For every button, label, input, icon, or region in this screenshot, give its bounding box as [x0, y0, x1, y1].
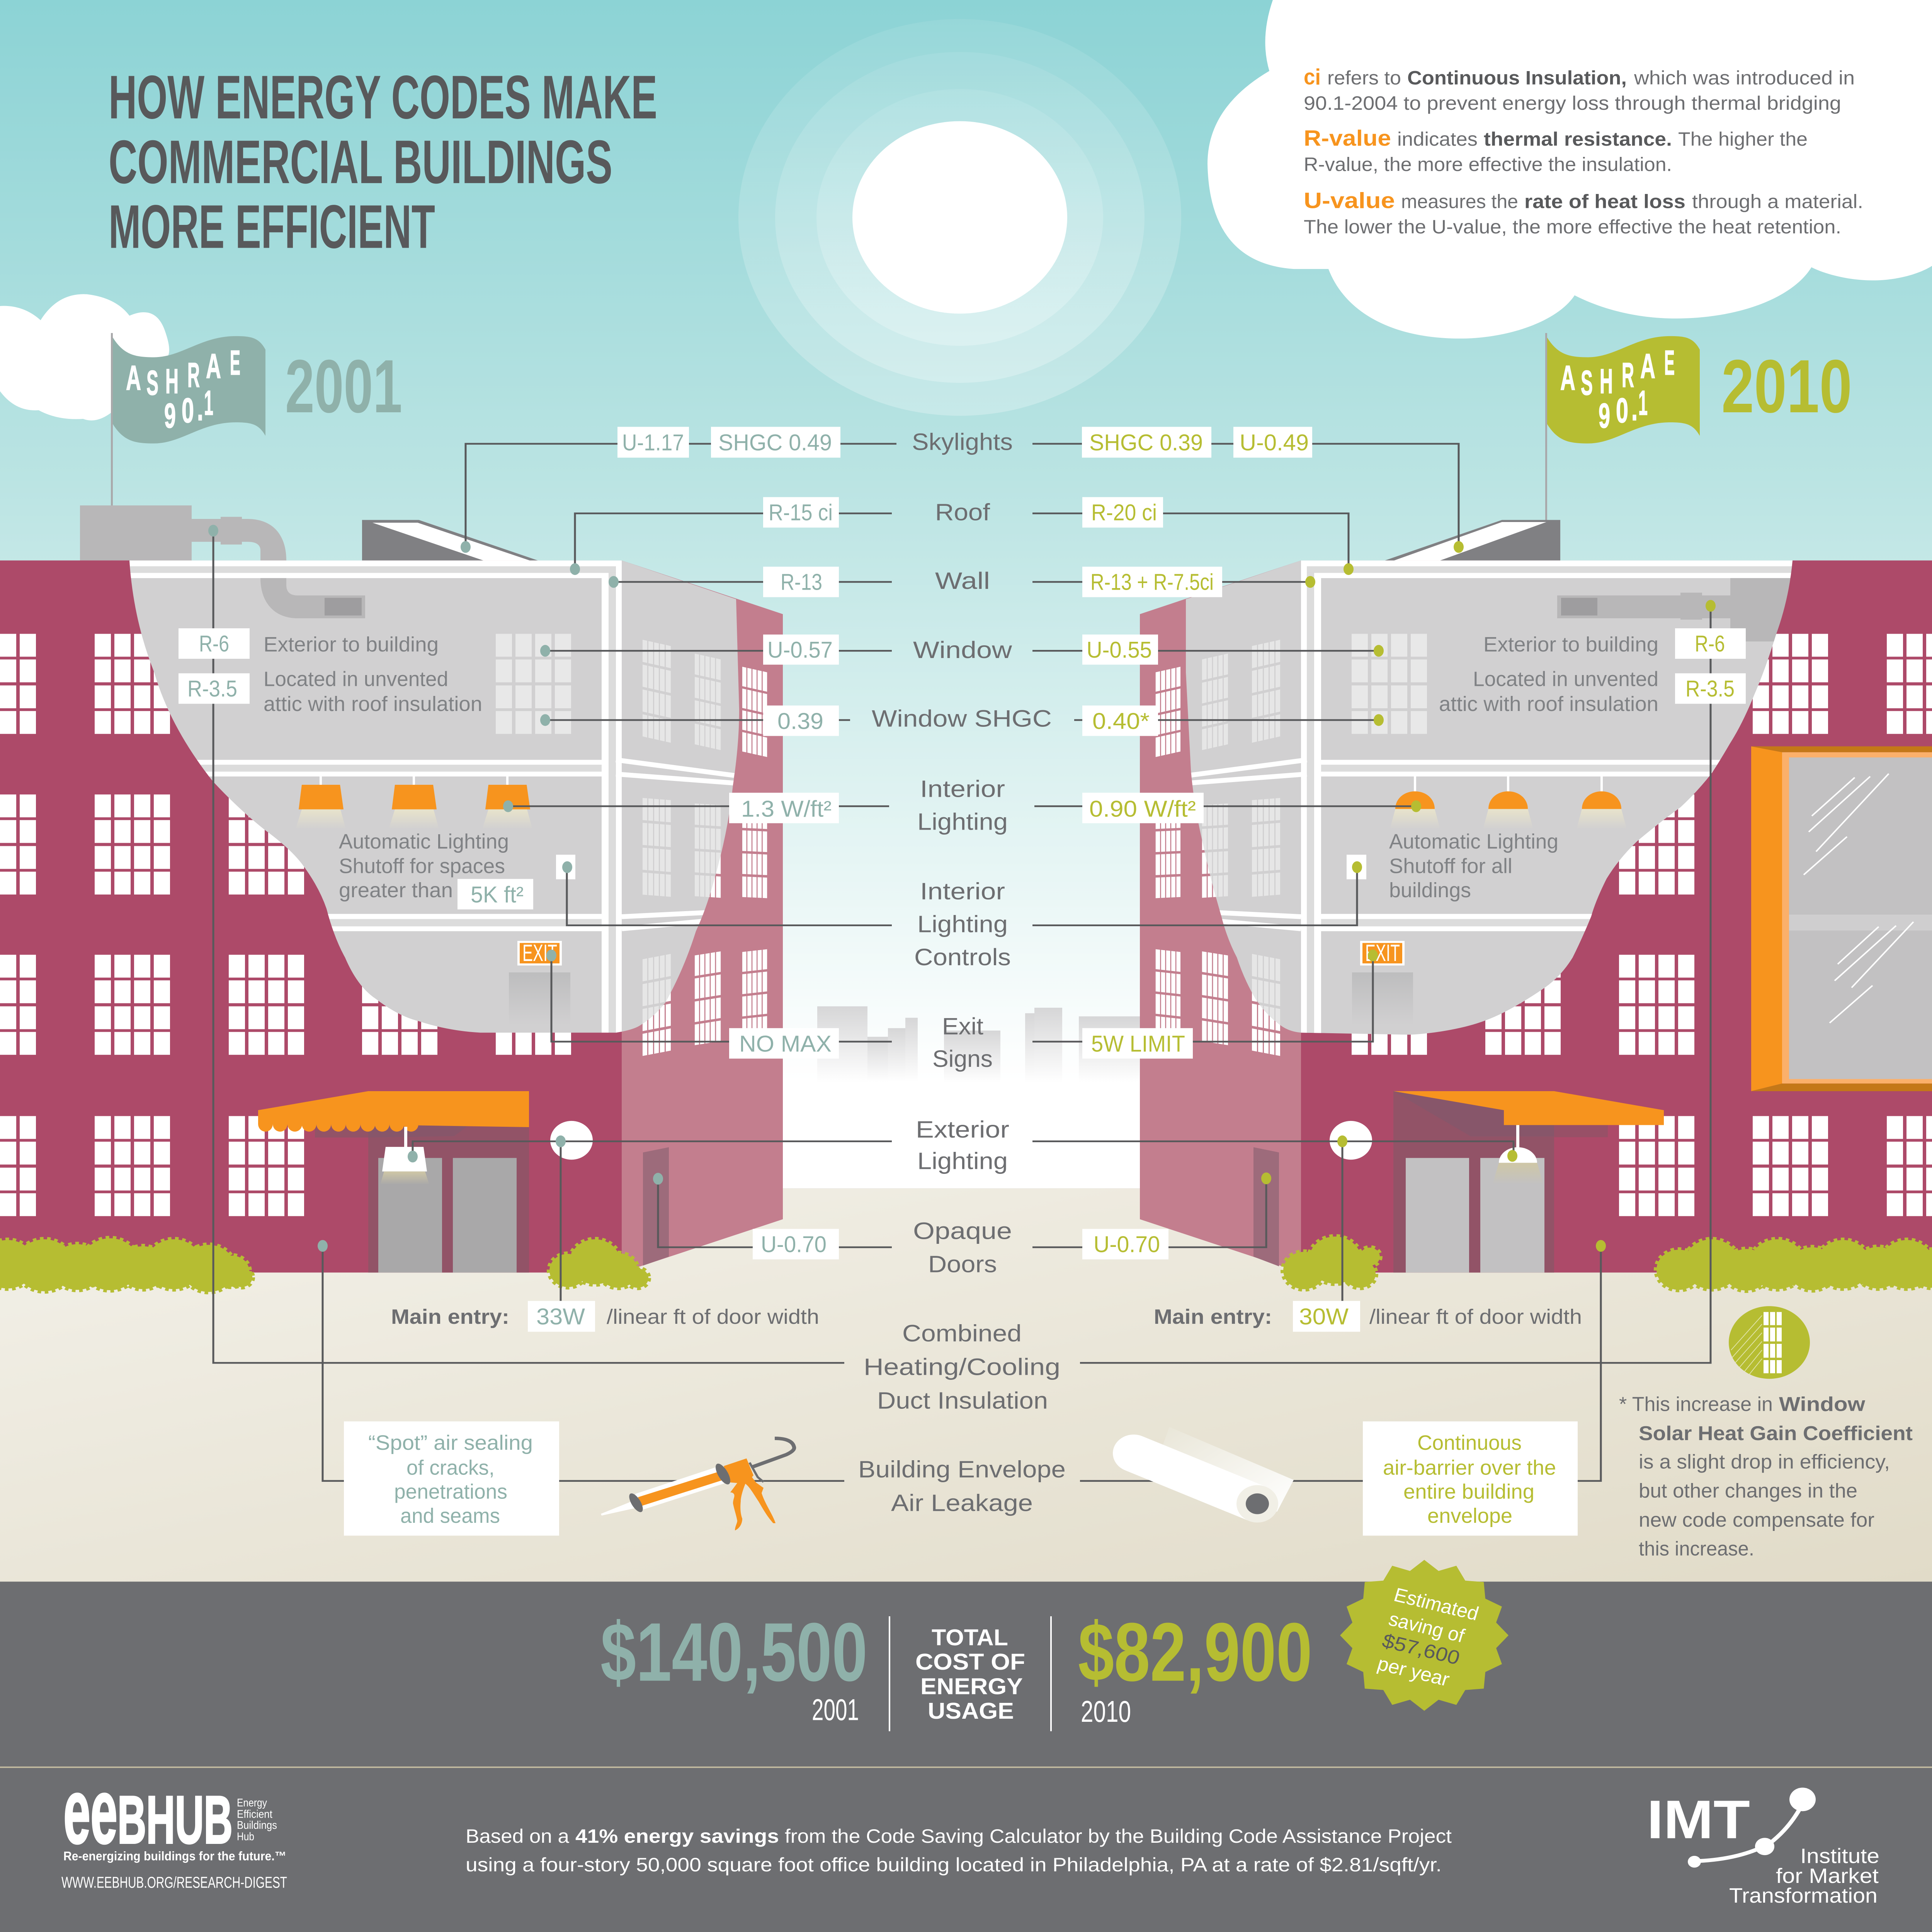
cloud: left — [0, 294, 169, 420]
notes inside 2001: Exterior to building — [264, 633, 439, 656]
flag: ASHRAE 90.1 left: 9 — [164, 396, 176, 435]
footnote: * This increase in — [1619, 1393, 1773, 1415]
side windows right — [1156, 640, 1280, 1056]
exit sign left: EXIT — [522, 940, 557, 966]
total cost 2001: $140,500 — [600, 1606, 867, 1699]
category labels: Interior — [920, 776, 1005, 802]
values 2001: SHGC 0.49 — [718, 430, 832, 456]
rooftop unit and duct left — [80, 505, 286, 560]
flag: ASHRAE 90.1 right: R — [1622, 356, 1634, 395]
entrance 2010 — [1393, 1091, 1608, 1272]
source note: 41% energy savings — [575, 1826, 779, 1847]
category labels: Roof — [935, 499, 990, 526]
wall light 2001 — [550, 1121, 593, 1160]
category labels: Heating/Cooling — [864, 1354, 1060, 1380]
category labels: Doors — [928, 1251, 997, 1277]
total cost label: TOTAL — [932, 1625, 1008, 1650]
footnote: Solar Heat Gain Coefficient — [1639, 1422, 1913, 1444]
flagpole right — [1545, 333, 1547, 561]
total cost 2001 — [600, 1606, 867, 1727]
footnote: is a slight drop in efficiency, — [1639, 1450, 1890, 1473]
connector lines 2010 — [1032, 444, 1711, 1481]
logo: eebhub: Re-energizing buildings for the future.™ — [63, 1849, 286, 1863]
definitions text: R-value, the more effective the insulation. — [1304, 154, 1672, 175]
category labels: Lighting — [917, 911, 1008, 937]
values 2001: U-0.70 — [761, 1232, 827, 1257]
notes inside 2010: Automatic Lighting — [1389, 830, 1558, 853]
skylight right — [1385, 520, 1560, 560]
logo: eebhub: Hub — [237, 1830, 254, 1843]
values 2001: 33W — [536, 1304, 585, 1330]
building 2010 walls — [1140, 560, 1932, 1272]
total cost 2010: 2010 — [1081, 1694, 1131, 1728]
values 2010: U-0.55 — [1087, 637, 1152, 663]
values 2010: U-0.70 — [1094, 1232, 1160, 1257]
callout: spot air sealing: “Spot” air sealing — [368, 1431, 533, 1454]
bottom band — [0, 1582, 1932, 1932]
exit sign left — [517, 940, 562, 966]
cutaway 2001 — [129, 560, 739, 1032]
flag: ASHRAE 90.1 left: S — [146, 364, 158, 402]
category labels: Duct Insulation — [877, 1388, 1048, 1414]
source note: from the Code Saving Calculator by the Building Code Assistance Project — [785, 1826, 1452, 1847]
definitions text: The lower the U-value, the more effective the heat retention. — [1304, 216, 1841, 238]
category labels: Window — [913, 637, 1012, 663]
bushes right — [1283, 1236, 1932, 1291]
attic duct right — [1557, 578, 1796, 641]
logo: eebhub: WWW.EEBHUB.ORG/RESEARCH-DIGEST — [61, 1874, 287, 1891]
values 2010: 30W — [1299, 1304, 1349, 1330]
category labels: Lighting — [917, 1148, 1008, 1174]
category labels: Exterior — [916, 1116, 1009, 1143]
occupancy sensors — [556, 855, 1366, 879]
notes inside 2001: Automatic Lighting — [339, 830, 509, 853]
logo: IMT — [1647, 1787, 1879, 1907]
entry lamp 2010 — [1493, 1125, 1543, 1184]
logo: IMT: Institute — [1800, 1845, 1879, 1868]
total cost label: USAGE — [928, 1698, 1014, 1724]
definitions text: rate of heat loss — [1524, 191, 1685, 213]
main entry 2010: Main entry: — [1154, 1305, 1272, 1328]
callout: continuous air barrier: entire building — [1403, 1480, 1534, 1503]
category labels — [858, 429, 1066, 1516]
category labels: Exit — [942, 1013, 983, 1039]
savings seal: saving of — [1386, 1608, 1467, 1647]
logo: eebhub: Energy — [237, 1796, 267, 1809]
pendant lamps 2001 — [296, 776, 532, 829]
values 2010: U-0.49 — [1240, 430, 1309, 456]
title: HOW ENERGY CODES MAKE — [109, 63, 657, 131]
category labels: Opaque — [913, 1218, 1012, 1244]
callout: continuous air barrier: air-barrier over the — [1383, 1456, 1556, 1480]
skyline — [817, 1006, 1140, 1082]
values 2001 — [187, 430, 833, 1330]
category labels: Wall — [935, 568, 990, 594]
icon: window badge — [1729, 1306, 1810, 1379]
callout: continuous air barrier — [1363, 1422, 1578, 1536]
values 2010: R-6 — [1695, 631, 1725, 656]
main entry 2010: /linear ft of door width — [1369, 1305, 1582, 1328]
attic duct left — [260, 578, 365, 618]
notes inside 2001: Shutoff for spaces — [339, 854, 505, 878]
source note — [466, 1826, 1452, 1876]
values 2010: 0.90 W/ft² — [1089, 796, 1196, 822]
flag: ASHRAE 90.1 left: H — [165, 362, 179, 401]
total cost label: ENERGY — [920, 1674, 1023, 1699]
flag: ASHRAE 90.1 right: S — [1581, 364, 1593, 402]
logo: IMT: Transformation — [1729, 1884, 1878, 1907]
year 2001: 2001 — [285, 344, 402, 429]
total cost 2010: $82,900 — [1078, 1606, 1312, 1699]
notes inside 2001: attic with roof insulation — [264, 692, 482, 716]
total cost label: COST OF — [915, 1649, 1025, 1675]
flag: ASHRAE 90.1 left — [113, 336, 265, 444]
flag: ASHRAE 90.1 left: A — [126, 359, 141, 398]
flag: ASHRAE 90.1 left: . — [197, 389, 203, 428]
total cost 2001: 2001 — [812, 1693, 859, 1727]
total cost label — [889, 1616, 1052, 1731]
main entry 2001 — [391, 1305, 819, 1328]
values 2010: 0.40* — [1092, 709, 1150, 734]
flag: ASHRAE 90.1 left: R — [187, 356, 200, 395]
callout: spot air sealing: and seams — [400, 1504, 500, 1527]
values 2001: U-0.57 — [767, 637, 833, 663]
values 2010: 5W LIMIT — [1091, 1031, 1185, 1057]
flag: ASHRAE 90.1 left: E — [230, 344, 240, 382]
awning 2010 — [1393, 1091, 1664, 1125]
values 2010: R-3.5 — [1685, 676, 1735, 702]
cloud: definitions — [1208, 0, 1932, 338]
category labels: Controls — [914, 944, 1011, 970]
logo: IMT: for Market — [1776, 1864, 1879, 1888]
values 2001: R-3.5 — [187, 676, 237, 702]
building 2001 walls — [0, 560, 783, 1272]
logo: IMT: IMT — [1647, 1789, 1750, 1850]
footnote: new code compensate for — [1639, 1509, 1874, 1531]
values 2001: 1.3 W/ft² — [741, 796, 832, 822]
values 2010 — [1087, 430, 1735, 1330]
notes inside 2010 — [1389, 633, 1658, 902]
values 2001: R-13 — [781, 570, 822, 595]
cutaway 2010 — [1186, 560, 1793, 1035]
definitions text: refers to — [1327, 67, 1401, 89]
notes inside 2001: Located in unvented — [264, 668, 448, 691]
values 2001: 0.39 — [777, 709, 823, 734]
notes inside 2010: buildings — [1389, 879, 1471, 902]
values 2001: R-6 — [199, 631, 229, 656]
definitions text — [1304, 65, 1863, 238]
definitions text: The higher the — [1678, 129, 1808, 150]
connector dots 2010 — [1261, 541, 1716, 1252]
notes inside 2010: Located in unvented — [1473, 668, 1658, 691]
skylight left — [362, 520, 538, 560]
entrance 2001 — [315, 1126, 529, 1272]
definitions text: ci — [1304, 65, 1321, 89]
definitions text: Continuous Insulation, — [1407, 67, 1627, 89]
category labels: Air Leakage — [891, 1490, 1033, 1516]
icon: caulk gun — [601, 1438, 794, 1531]
year 2010: 2010 — [1721, 344, 1852, 429]
values 2001: 5K ft² — [471, 882, 524, 908]
side windows left — [643, 640, 767, 1056]
interior window right — [1352, 634, 1427, 734]
logo: eebhub — [61, 1760, 287, 1891]
windows building 2001 — [0, 634, 571, 1216]
connector lines 2001 — [213, 444, 896, 1481]
side door right — [1253, 1147, 1279, 1266]
definitions text: through a material. — [1692, 191, 1863, 213]
logo: eebhub: BHUB — [117, 1782, 233, 1858]
values 2001: NO MAX — [739, 1031, 832, 1057]
values 2001: R-15 ci — [769, 500, 833, 526]
callout: spot air sealing — [344, 1422, 559, 1536]
title — [109, 63, 657, 261]
flag: ASHRAE 90.1 right: 9 — [1599, 396, 1610, 435]
title: COMMERCIAL BUILDINGS — [109, 128, 612, 196]
footnote: Window — [1779, 1393, 1865, 1415]
flag: ASHRAE 90.1 left: 1 — [204, 384, 213, 422]
connector dots 2001 — [208, 525, 663, 1252]
flag: ASHRAE 90.1 right: 1 — [1638, 384, 1648, 422]
category labels: Signs — [932, 1046, 993, 1072]
definitions text: measures the — [1401, 191, 1518, 213]
sun — [738, 19, 1181, 416]
flag: ASHRAE 90.1 right — [1547, 336, 1700, 444]
definitions text: R-value — [1304, 126, 1391, 150]
source note: Based on a — [466, 1826, 569, 1847]
savings seal: per year — [1375, 1653, 1452, 1690]
title: MORE EFFICIENT — [109, 192, 435, 261]
side door left — [643, 1147, 669, 1265]
notes inside 2010: Exterior to building — [1483, 633, 1658, 656]
category labels: Skylights — [912, 429, 1013, 455]
flag: ASHRAE 90.1 right: . — [1631, 389, 1638, 428]
definitions text: U-value — [1304, 188, 1395, 213]
values 2001: U-1.17 — [622, 430, 684, 456]
notes inside 2010: Shutoff for all — [1389, 854, 1512, 878]
flag: ASHRAE 90.1 right: 0 — [1616, 391, 1628, 430]
icon: air barrier roll — [1134, 1427, 1294, 1522]
exit sign right: EXIT — [1365, 940, 1400, 966]
flag: ASHRAE 90.1 right: H — [1600, 362, 1613, 401]
values 2010: R-13 + R-7.5ci — [1090, 570, 1214, 595]
flag: ASHRAE 90.1 right: E — [1664, 344, 1675, 382]
callout: continuous air barrier: envelope — [1427, 1504, 1512, 1527]
exit door right — [1352, 973, 1413, 1025]
exit sign right — [1360, 940, 1405, 966]
category labels: Interior — [920, 878, 1005, 905]
bushes left — [0, 1238, 648, 1292]
values 2010: SHGC 0.39 — [1089, 430, 1203, 456]
category labels: Building Envelope — [858, 1456, 1066, 1483]
category labels: Combined — [902, 1320, 1022, 1347]
notes inside 2001 — [264, 633, 509, 902]
notes inside 2010: attic with roof insulation — [1439, 692, 1658, 716]
footnote — [1619, 1393, 1913, 1560]
main entry 2001: /linear ft of door width — [607, 1305, 819, 1328]
flag: ASHRAE 90.1 left: 0 — [182, 391, 194, 430]
footnote: but other changes in the — [1639, 1479, 1857, 1502]
definitions text: indicates — [1397, 129, 1478, 150]
total cost 2010 — [1078, 1606, 1312, 1728]
category labels: Lighting — [917, 809, 1008, 835]
windows building 2010 — [1352, 634, 1932, 1216]
definitions text: 90.1-2004 to prevent energy loss through thermal bridging — [1304, 93, 1841, 114]
definitions text: which was introduced in — [1634, 67, 1855, 89]
flag: ASHRAE 90.1 left: A — [206, 347, 221, 386]
savings seal: Estimated — [1391, 1584, 1481, 1625]
sky background — [0, 0, 1932, 1189]
ground — [0, 1189, 1932, 1582]
footnote: this increase. — [1639, 1537, 1754, 1560]
interior window left — [496, 634, 571, 734]
flag: ASHRAE 90.1 right: A — [1560, 359, 1575, 398]
values 2010: R-20 ci — [1091, 500, 1157, 526]
main entry 2010 — [1154, 1305, 1582, 1328]
wall light 2010 — [1330, 1121, 1372, 1160]
value boxes 2001 — [179, 427, 840, 1332]
savings seal — [1340, 1560, 1509, 1711]
flag: ASHRAE 90.1 right: A — [1640, 347, 1655, 386]
flagpole left — [111, 333, 113, 561]
entry lamp 2001 — [380, 1127, 429, 1185]
awning 2001 — [258, 1091, 529, 1132]
callout: spot air sealing: of cracks, — [406, 1456, 495, 1480]
logo: eebhub: ee — [63, 1760, 117, 1863]
savings seal: $57,600 — [1380, 1630, 1463, 1669]
large window building 2010 — [1751, 747, 1932, 1091]
callout: spot air sealing: penetrations — [394, 1480, 507, 1503]
main entry 2001: Main entry: — [391, 1305, 509, 1328]
notes inside 2001: greater than — [339, 879, 453, 902]
logo: eebhub: Efficient — [237, 1808, 272, 1820]
category labels: Window SHGC — [872, 706, 1052, 732]
source note: using a four-story 50,000 square foot office building located in Philadelphia, PA at a rate of $2.81/sqft/yr. — [466, 1854, 1442, 1876]
value boxes 2010 — [1082, 427, 1746, 1332]
exit door left — [509, 973, 570, 1025]
logo: eebhub: Buildings — [237, 1819, 277, 1832]
callout: continuous air barrier: Continuous — [1417, 1431, 1522, 1454]
definitions text: thermal resistance. — [1484, 129, 1672, 150]
divider — [0, 1767, 1932, 1768]
pendant lamps 2010 — [1390, 776, 1627, 829]
